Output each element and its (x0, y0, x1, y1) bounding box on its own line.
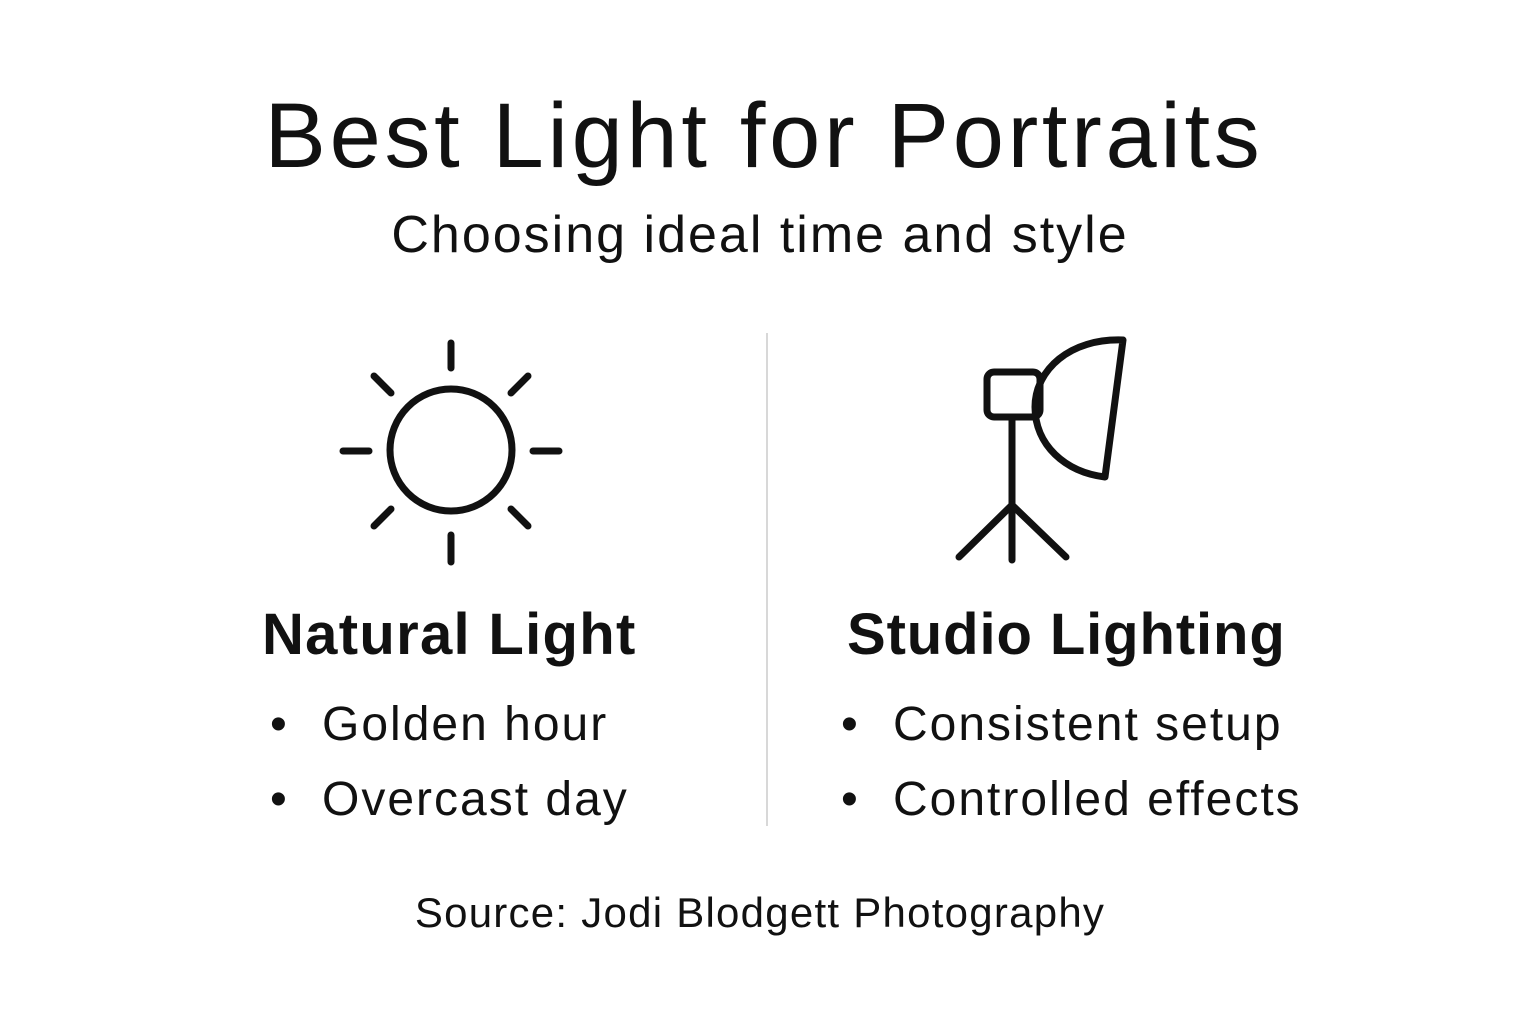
list: studio lighting (841, 698, 1302, 826)
list: studio lighting: Controlled effects (893, 773, 1302, 826)
list: natural light (270, 698, 629, 826)
heading: natural light: Natural Light (262, 602, 637, 667)
list: natural light: • (270, 773, 289, 826)
list: studio lighting: Consistent setup (893, 698, 1283, 751)
source: Source: Jodi Blodgett Photography (415, 889, 1105, 936)
list: studio lighting: • (841, 773, 860, 826)
list: natural light: Golden hour (322, 698, 608, 751)
subtitle: Choosing ideal time and style (391, 206, 1129, 264)
title: Best Light for Portraits (265, 85, 1263, 187)
list: studio lighting: • (841, 698, 860, 751)
icon: sun (343, 343, 559, 562)
icon: studio light (959, 340, 1123, 560)
list: natural light: Overcast day (322, 773, 629, 826)
heading: studio lighting: Studio Lighting (847, 602, 1286, 667)
list: natural light: • (270, 698, 289, 751)
